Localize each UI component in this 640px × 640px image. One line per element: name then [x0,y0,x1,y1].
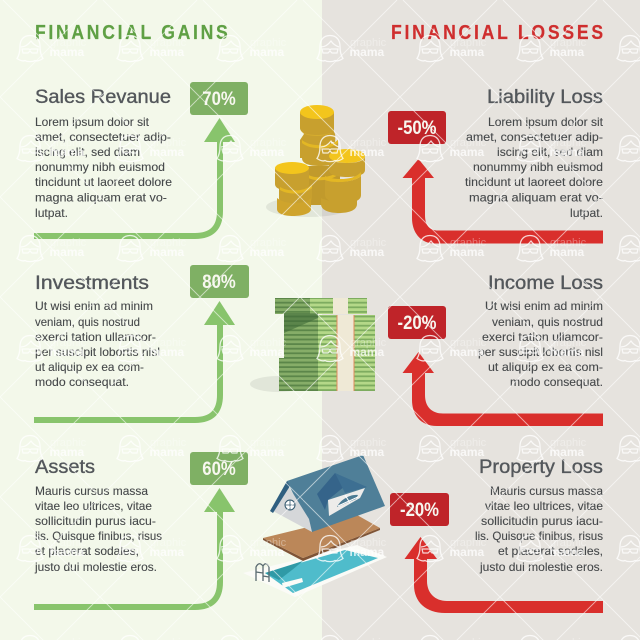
roof [287,455,385,532]
icon: banknote stacks [250,298,375,392]
panel: property loss [390,457,603,613]
text block: investments body: exerci tation ullamcor- [35,330,156,344]
text block: income loss body: exerci tation ullamcor- [482,330,603,344]
badge: -50%: -50% [398,117,437,138]
text block: investments body: veniam, quis nostrud [35,315,140,329]
title: financial losses: FINANCIAL LOSSES [391,21,603,43]
deck floor [263,515,380,561]
text block: investments body: modo consequat. [35,375,129,389]
text block: investments body [35,299,160,389]
text block: income loss body: veniam, quis nostrud [492,315,603,329]
text block: sales revenue body: lutpat. [35,206,68,220]
text block: sales revenue body: Lorem ipsum dolor sit [35,115,150,129]
pool dark wall [265,561,303,580]
text block: sales revenue body: tincidunt ut laoreet dolore [35,175,172,189]
heading: sales revanue: Sales Revanue [35,87,171,108]
badge: -50% [388,111,446,144]
text block: liability loss body: iscing elit, sed diam [497,145,603,159]
text block: assets body: Mauris cursus massa [35,484,148,498]
text block: property loss body: justo dui molestie eros. [479,560,603,574]
text block: sales revenue body: iscing elit, sed diam [35,145,140,159]
panel: liability loss [388,87,604,244]
round window [285,500,295,510]
panel: financial gains background [0,0,322,640]
badge: -20% property [390,493,449,526]
heading: income loss: Income Loss [488,273,603,294]
text block: property loss body: lis. Quisque finibus, risus [475,529,603,543]
left dark face of notes [279,314,318,391]
panel: income loss [388,273,603,426]
text block: assets body [34,484,162,574]
text block: assets body: justo dui molestie eros. [34,560,157,574]
text block: liability loss body: lutpat. [570,206,603,220]
text block: property loss body: et placerat sodales, [498,544,603,558]
text block: property loss body: sollicitudin purus iacu- [481,514,603,528]
badge: -20% income: -20% [398,312,437,333]
back stack dark side [275,298,310,314]
text block: liability loss body: Lorem ipsum dolor sit [488,115,604,129]
text block: income loss body [478,299,603,389]
text block: sales revenue body: nonummy nibh euismod [35,160,165,174]
badge: 80% [190,265,249,298]
dormer wall [328,488,365,516]
text block: assets body: sollicitudin purus iacu- [35,514,156,528]
text block: liability loss body: amet, consectetuer adip- [466,130,603,144]
panel: financial losses background [322,0,640,640]
front stack [275,162,312,216]
badge: -20% property: -20% [400,499,439,520]
band edges [337,315,354,391]
text block: liability loss body [465,115,604,220]
text block: income loss body: per suscipit lobortis nisl [478,345,603,359]
pool base [243,545,387,597]
text block: income loss body: Ut wisi enim ad minim [485,299,603,313]
shaded corner [284,313,318,333]
gable eave [270,481,290,513]
paper band back [333,298,348,314]
text block: sales revenue body: amet, consectetuer adip- [35,130,171,144]
icon: deconstructed house with pool [243,455,387,597]
badge: 80%: 80% [202,271,236,292]
panel: assets [34,452,248,607]
back stack of notes [275,298,367,314]
panel: investments [34,265,249,420]
back stack [300,105,340,205]
right face of notes [318,315,375,391]
text block: investments body: per suscipit lobortis nisl [35,345,160,359]
heading: liability loss: Liability Loss [487,87,603,108]
text block: income loss body: modo consequat. [510,375,603,389]
heading: property loss: Property Loss [479,457,603,478]
text block: sales revenue body [35,115,172,220]
arrow: liability loss [402,159,603,244]
heading: assets: Assets [35,457,95,478]
dormer window [337,495,358,507]
arrow: sales revenue growth [34,118,235,236]
dormer roof top [335,473,367,493]
gable wall [273,487,312,532]
text block: investments body: Ut wisi enim ad minim [35,299,153,313]
icon: coin stacks [266,105,365,217]
paper band front [337,315,354,391]
badge: 60% [190,452,248,485]
badge: 60%: 60% [202,458,236,479]
text block: sales revenue body: magna aliquam erat vo- [35,190,167,204]
arrow: assets growth [34,488,235,607]
heading: investments: Investments [35,273,149,294]
text block: liability loss body: nonummy nibh euismod [473,160,603,174]
badge: 70%: 70% [202,88,236,109]
text block: liability loss body: tincidunt ut laoreet dolore [465,175,603,189]
arrow: investments growth [34,301,235,420]
text block: liability loss body: magna aliquam erat vo- [469,190,603,204]
badge: 70% [190,82,248,115]
pool ladder [256,564,269,582]
right stack [321,149,365,213]
pool step [282,578,303,588]
panel: sales revenue [34,82,248,236]
text block: property loss body [475,484,603,574]
text block: property loss body: Mauris cursus massa [490,484,603,498]
dormer roof dark face [317,473,345,510]
pool water [265,550,378,593]
title: financial gains: FINANCIAL GAINS [35,21,228,43]
badge: -20% income [388,306,446,339]
arrow: property loss [404,537,603,613]
text block: assets body: lis. Quisque finibus, risus [35,529,162,543]
text block: assets body: vitae leo ultrices, vitae [35,499,152,513]
text block: property loss body: vitae leo ultrices, vitae [485,499,603,513]
arrow: income loss [402,352,603,426]
text block: investments body: ut aliquip ex ea com- [35,360,144,374]
text block: assets body: et placerat sodales, [35,544,139,558]
text block: income loss body: ut aliquip ex ea com- [488,360,603,374]
